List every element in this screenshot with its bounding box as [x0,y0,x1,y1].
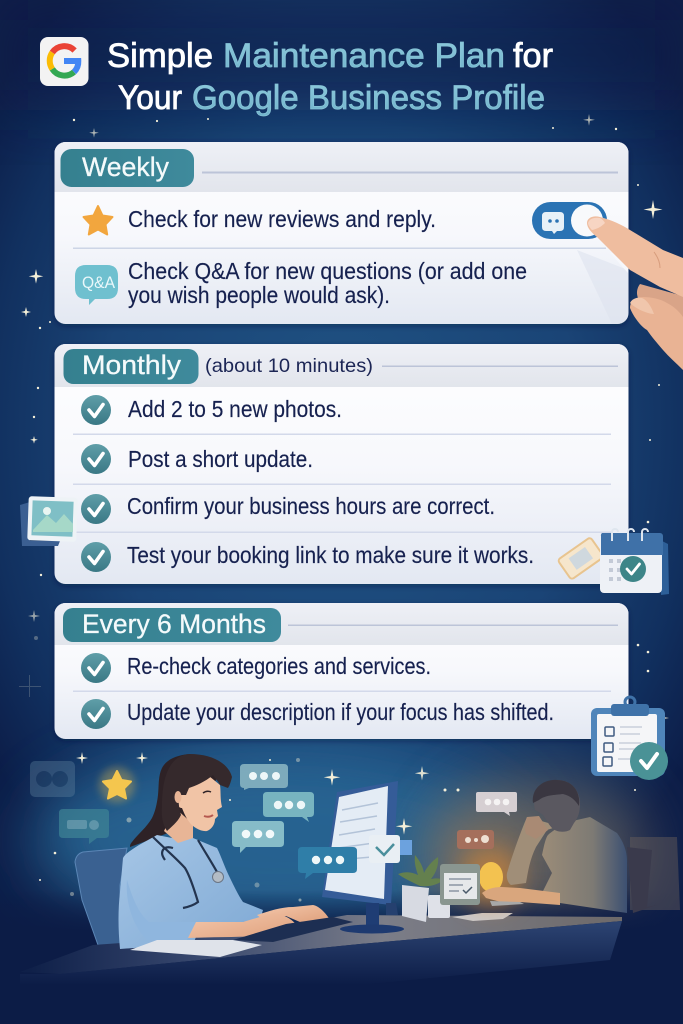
keyboard [490,901,524,906]
panel: monthly [54,344,628,584]
torso [542,817,627,913]
icon: check [81,699,111,729]
keyboard [233,917,353,942]
heading: weekly: Weekly [82,152,169,182]
heading: weekly [60,149,194,187]
back arm and hand [257,905,330,922]
ear [174,791,182,803]
google logo tile [40,37,88,86]
text: booking: Test your booking link to make sure it works. [127,542,534,568]
icon: ticket [558,537,604,580]
sleeve [127,880,197,940]
lower arm and hand [482,887,560,905]
face details [203,791,213,817]
shirt [118,835,263,949]
head [534,780,580,832]
text: photos: Add 2 to 5 new photos. [128,396,342,422]
icon: star [84,206,112,234]
icon: clipboard with check [591,697,668,780]
hair front [162,754,232,831]
icon: calendar with check [600,529,669,595]
text: hours: Confirm your business hours are correct. [127,493,495,519]
text: q&a: Check Q&A for new questions (or add one [128,258,527,284]
text: q&a [128,258,527,308]
icon: toggle with chat bubble [532,202,607,239]
text: reviews: Check for new reviews and reply. [128,206,436,232]
chat bubble: three dots 3 [232,821,284,853]
text: description: Update your description if your focus has shifted. [127,699,554,725]
heading: monthly: Monthly [82,350,182,380]
title: Maintenance Plan [223,37,505,75]
background cabinet [630,837,680,910]
man chair [627,847,657,913]
chat bubble: blue [298,847,357,879]
chat bubble: dim dots [30,761,75,797]
illustration: desk scene [20,754,680,1000]
chair [75,848,127,945]
chat bubble: teal dim [59,809,109,844]
panel: weekly [54,142,628,324]
chat bubble: pale [476,792,517,816]
man [482,780,627,913]
neck [164,808,193,843]
woman [118,754,330,949]
chat bubble: three dots 2 [263,792,314,822]
icon: check [81,653,111,683]
notebook [130,940,262,957]
title: Google Business Profile [192,79,545,117]
plant [398,855,443,886]
text: categories: Re-check categories and services. [127,653,431,679]
chat bubble: orange [457,830,494,849]
icon: q&a bubble: Q&A [82,273,116,292]
raised arm [507,817,559,885]
pot and cup [402,885,450,922]
desk calendar [440,864,480,905]
desk [20,915,622,1000]
icon: glowing star [99,767,135,803]
icon: pointing hand [587,216,683,370]
heading: every 6 months: Every 6 Months [82,609,266,639]
icon: photo card [20,496,78,546]
icon: check [81,395,111,425]
title [107,37,553,117]
heading: monthly [64,349,198,384]
icon: check [81,494,111,524]
icon: check [81,444,111,474]
text: q&a: you wish people would ask). [128,282,390,308]
subheading: duration: (about 10 minutes) [205,355,373,377]
face [176,776,222,831]
panel: every 6 months [54,603,628,739]
stethoscope [153,837,217,908]
title: Your [118,79,182,117]
paper [452,913,513,921]
lamp glow [461,848,521,908]
monitor [322,781,404,934]
icon: check [81,542,111,572]
text: update: Post a short update. [128,446,313,472]
title: for [513,37,553,75]
hair back [130,754,218,847]
hand on face [525,816,548,839]
stars and sparkles [19,114,669,902]
front forearm and hand [188,913,298,938]
check card [369,835,412,863]
chat bubble: three dots 1 [240,764,288,790]
title: Simple [107,37,213,75]
icon: q&a bubble [75,265,118,305]
